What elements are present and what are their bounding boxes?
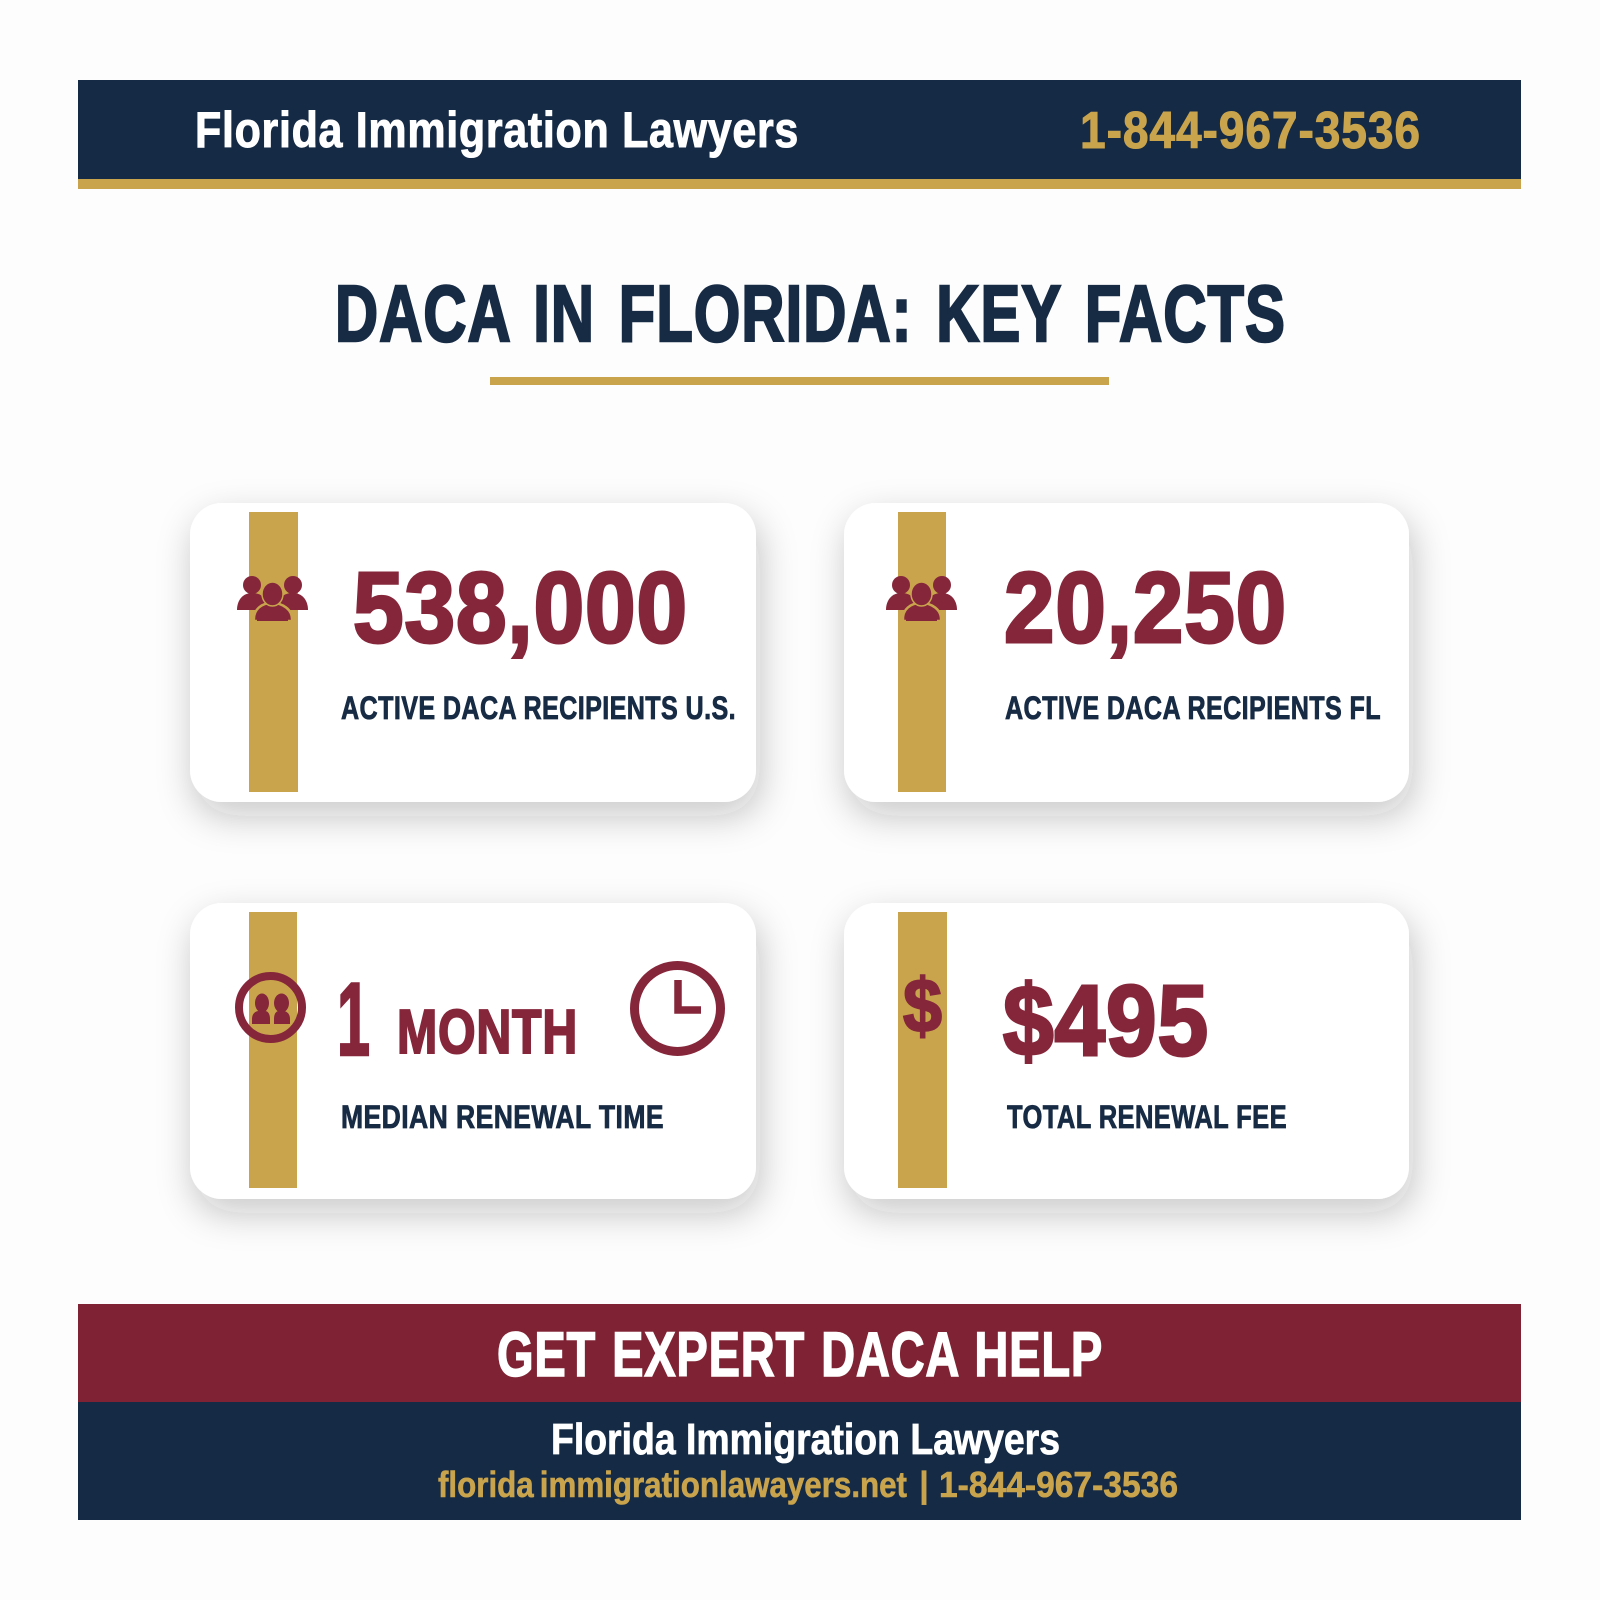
footer website and phone: florida immigrationlawayers.net (438, 1464, 907, 1505)
icon: clock (634, 966, 720, 1052)
icon: people group (237, 576, 308, 621)
footer firm name: Florida Immigration Lawyers (551, 1415, 1060, 1464)
label: total renewal fee: TOTAL RENEWAL FEE (1007, 1099, 1287, 1135)
title underline (490, 377, 1109, 385)
title: DACA IN FLORIDA: KEY FACTS (335, 269, 1286, 358)
icon: dollar sign: $ (903, 964, 942, 1049)
icon: circled people (239, 976, 302, 1039)
header phone number: 1-844-967-3536 (1080, 102, 1421, 160)
label: active DACA recipients FL: ACTIVE DACA RECIPIENTS FL (1005, 690, 1381, 726)
footer website and phone: | (919, 1464, 929, 1506)
stat: 1 month: 1 (337, 962, 370, 1078)
label: active DACA recipients U.S.: ACTIVE DACA RECIPIENTS U.S. (341, 690, 736, 726)
panel: active recipients FL (844, 503, 1409, 802)
contact footer (78, 1402, 1521, 1520)
panel: active recipients U.S. (190, 503, 756, 802)
stat: $495: $495 (1003, 965, 1209, 1077)
stat: 538,000: 538,000 (353, 552, 688, 664)
call to action banner (78, 1304, 1521, 1402)
footer website and phone: 1-844-967-3536 (939, 1464, 1178, 1505)
label: median renewal time: MEDIAN RENEWAL TIME (341, 1099, 664, 1135)
header firm name: Florida Immigration Lawyers (195, 102, 799, 158)
stat: 1 month (337, 962, 578, 1078)
header banner (78, 80, 1521, 189)
call to action heading: GET EXPERT DACA HELP (497, 1320, 1103, 1390)
panel: median renewal time (190, 903, 756, 1199)
icon: people group (886, 576, 957, 621)
stat: 20,250: 20,250 (1004, 552, 1287, 664)
panel: total renewal fee (844, 903, 1409, 1199)
stat: 1 month: MONTH (397, 998, 578, 1067)
